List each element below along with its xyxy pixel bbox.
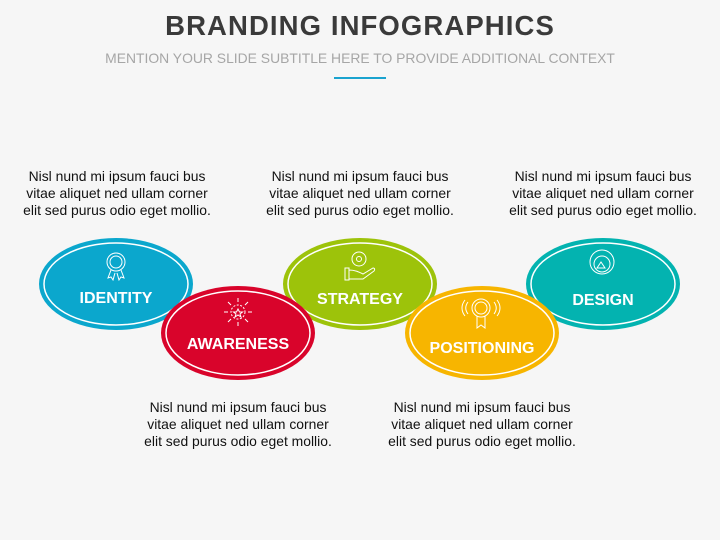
- ellipse: strategy: STRATEGY: [317, 291, 403, 308]
- text: design: [509, 168, 697, 218]
- icon: award: [462, 299, 500, 328]
- ellipse: identity: [39, 238, 193, 330]
- ellipse: awareness: [161, 286, 315, 380]
- text: identity: [23, 168, 211, 218]
- text: identity: Nisl nund mi ipsum fauci bus: [29, 168, 205, 184]
- text: awareness: Nisl nund mi ipsum fauci bus: [150, 399, 326, 415]
- text: positioning: Nisl nund mi ipsum fauci bus: [394, 399, 570, 415]
- ellipse: identity: IDENTITY: [80, 290, 153, 307]
- text: design: vitae aliquet ned ullam corner: [512, 185, 694, 201]
- ellipse: design: [526, 238, 680, 330]
- text: positioning: vitae aliquet ned ullam corner: [391, 416, 573, 432]
- title: BRANDING INFOGRAPHICS: [165, 10, 555, 41]
- text: identity: vitae aliquet ned ullam corner: [26, 185, 208, 201]
- text: strategy: Nisl nund mi ipsum fauci bus: [272, 168, 448, 184]
- text: awareness: elit sed purus odio eget mollio.: [144, 433, 332, 449]
- text: awareness: vitae aliquet ned ullam corner: [147, 416, 329, 432]
- text: design: Nisl nund mi ipsum fauci bus: [515, 168, 691, 184]
- icon: sun star: [224, 298, 252, 326]
- icon: brand badge: [107, 253, 125, 280]
- ellipse: design: DESIGN: [572, 292, 634, 309]
- text: strategy: vitae aliquet ned ullam corner: [269, 185, 451, 201]
- accent line: [334, 77, 386, 79]
- text: positioning: elit sed purus odio eget mollio.: [388, 433, 576, 449]
- text: strategy: [266, 168, 454, 218]
- text: awareness: [144, 399, 332, 449]
- ellipse: strategy: [283, 238, 437, 330]
- text: design: elit sed purus odio eget mollio.: [509, 202, 697, 218]
- ellipse: positioning: POSITIONING: [430, 340, 534, 357]
- text: strategy: elit sed purus odio eget mollio.: [266, 202, 454, 218]
- icon: gear hand: [345, 252, 375, 280]
- text: positioning: [388, 399, 576, 449]
- icon: design: [590, 250, 614, 274]
- ellipse: positioning: [405, 286, 559, 380]
- subtitle: MENTION YOUR SLIDE SUBTITLE HERE TO PROVIDE ADDITIONAL CONTEXT: [105, 50, 615, 66]
- text: identity: elit sed purus odio eget mollio.: [23, 202, 211, 218]
- ellipse: awareness: AWARENESS: [187, 336, 289, 353]
